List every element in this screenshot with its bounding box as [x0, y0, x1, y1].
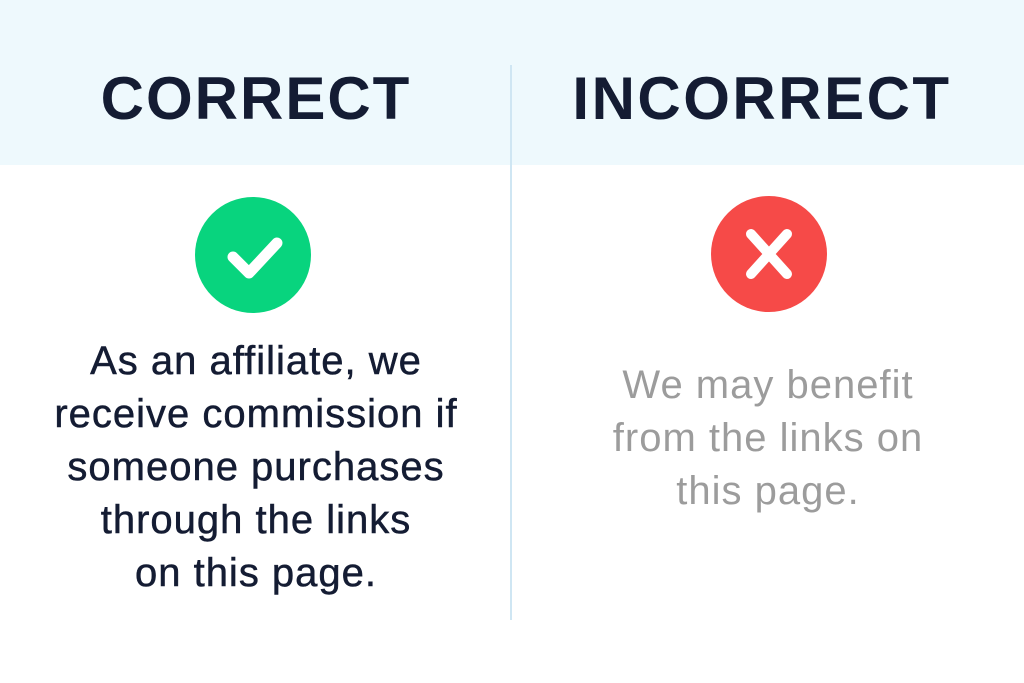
- text: correct disclosure: receive commission if: [54, 392, 458, 436]
- text: correct disclosure: through the links: [101, 498, 411, 542]
- text: correct disclosure: [54, 339, 458, 595]
- text: incorrect disclosure: from the links on: [613, 416, 923, 460]
- text: correct disclosure: someone purchases: [67, 445, 445, 489]
- icon: green check: [195, 197, 311, 313]
- title: correct: CORRECT: [101, 65, 411, 132]
- icon: red cross: [711, 196, 827, 312]
- text: incorrect disclosure: [613, 363, 923, 513]
- text: incorrect disclosure: We may benefit: [622, 363, 914, 407]
- title: incorrect: INCORRECT: [572, 65, 952, 132]
- text: correct disclosure: on this page.: [135, 551, 377, 595]
- text: incorrect disclosure: this page.: [676, 469, 860, 513]
- text: correct disclosure: As an affiliate, we: [90, 339, 422, 383]
